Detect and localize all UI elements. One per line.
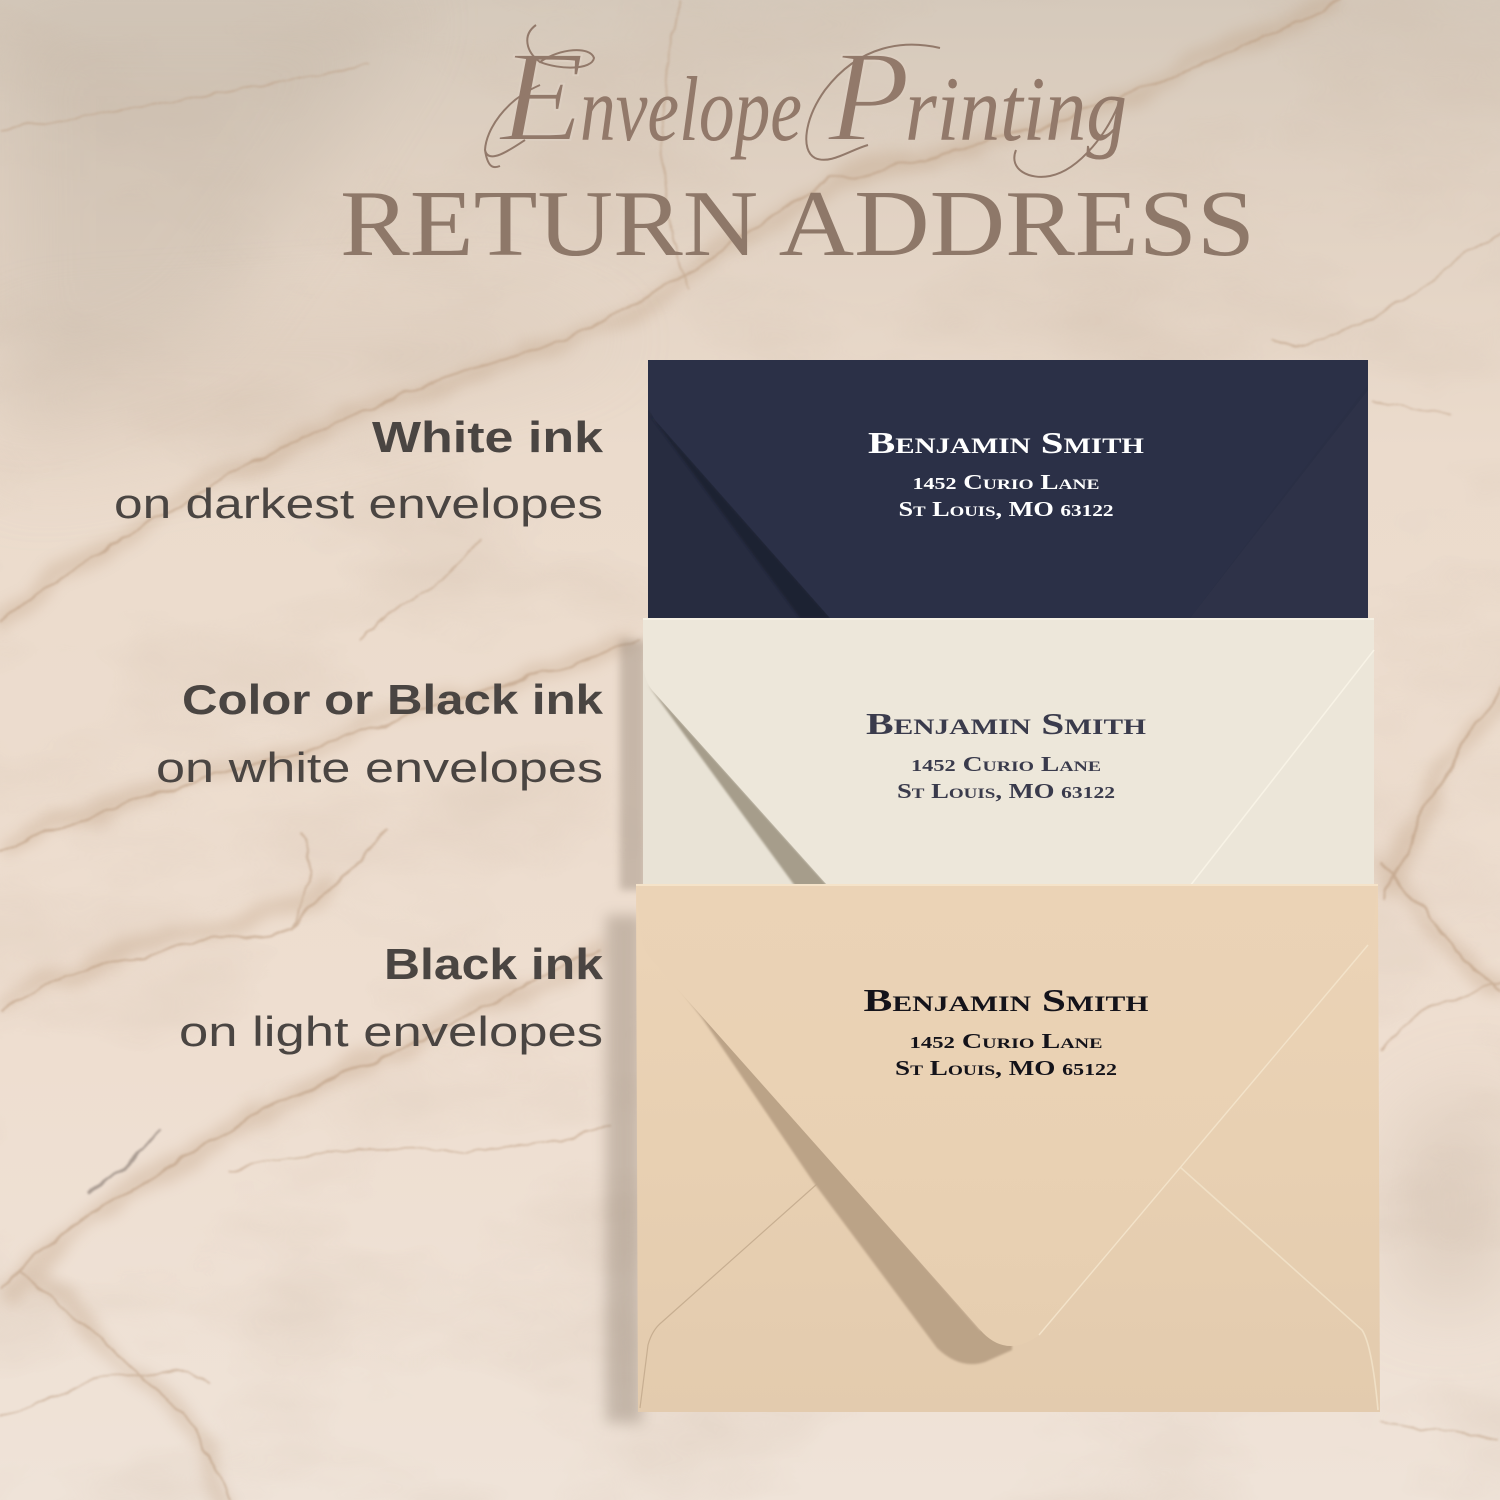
text: tan envelope address: Benjamin Smith xyxy=(864,982,1148,1018)
text: tan envelope address: St Louis, MO 65122 xyxy=(895,1056,1117,1080)
title swashes xyxy=(485,25,1120,177)
title: Envelope Printing: rinting xyxy=(905,58,1127,160)
label: color or black ink: on white envelopes xyxy=(156,744,603,791)
flap shadow xyxy=(646,945,1012,1364)
text: navy address: 1452 Curio Lane xyxy=(912,470,1100,494)
text: white envelope address xyxy=(866,706,1146,803)
text: white envelope address: Benjamin Smith xyxy=(866,706,1146,741)
envelope: tan xyxy=(606,884,1380,1423)
title: Envelope Printing: P xyxy=(827,25,910,169)
title: RETURN ADDRESS: RETURN ADDRESS xyxy=(340,172,1255,276)
envelope: navy xyxy=(648,360,1368,620)
title: Envelope Printing: nvelope xyxy=(580,58,802,160)
title: Envelope Printing xyxy=(485,25,1127,177)
label: white ink xyxy=(114,413,604,527)
text: white envelope address: St Louis, MO 63122 xyxy=(897,779,1115,803)
label: white ink: White ink xyxy=(372,413,604,462)
label: white ink: on darkest envelopes xyxy=(114,480,603,527)
text: navy address: Benjamin Smith xyxy=(868,425,1144,460)
envelope: white xyxy=(620,618,1374,890)
text: white envelope address: 1452 Curio Lane xyxy=(911,752,1101,776)
text: navy address xyxy=(868,425,1144,521)
text: tan envelope address: 1452 Curio Lane xyxy=(910,1029,1102,1053)
label: color or black ink xyxy=(156,676,604,791)
label: black ink: on light envelopes xyxy=(179,1008,603,1055)
title: Envelope Printing: E xyxy=(498,25,584,169)
text: tan envelope address xyxy=(864,982,1148,1080)
label: black ink: Black ink xyxy=(384,940,604,989)
envelope flap xyxy=(636,885,1378,1346)
label: black ink xyxy=(179,940,604,1055)
label: color or black ink: Color or Black ink xyxy=(182,676,604,723)
text: navy address: St Louis, MO 63122 xyxy=(898,497,1114,521)
